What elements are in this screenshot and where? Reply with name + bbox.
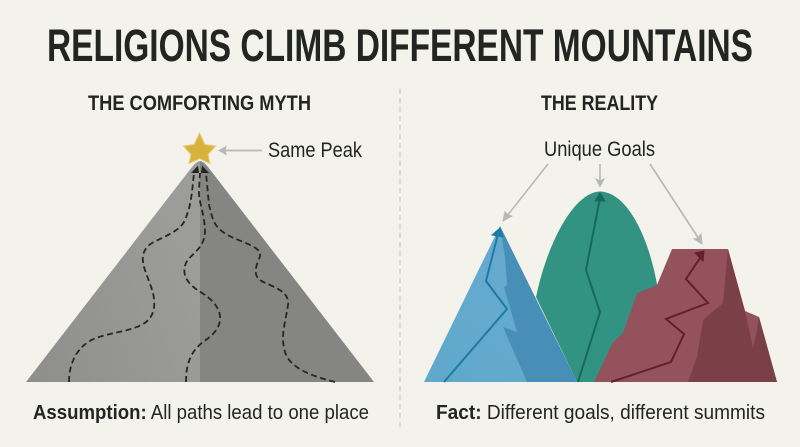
heading: the reality: THE REALITY — [541, 92, 658, 115]
panel: the comforting myth — [26, 92, 374, 424]
dashed paths — [69, 173, 335, 382]
grey mountain — [26, 161, 374, 382]
arrowheads at the peak — [191, 166, 209, 173]
red mountain — [594, 249, 777, 382]
blue route — [444, 228, 507, 382]
panel: the reality — [424, 92, 777, 424]
icon: gold star — [184, 133, 216, 164]
heading: the comforting myth: THE COMFORTING MYTH — [88, 92, 311, 115]
label: unique goals: Unique Goals — [544, 138, 655, 161]
blue mountain — [424, 226, 577, 382]
arrow to star — [219, 146, 262, 154]
arrows to summits — [503, 164, 702, 244]
red route — [611, 251, 708, 382]
green mountain — [536, 192, 658, 382]
green route — [578, 193, 605, 382]
label: same peak: Same Peak — [268, 139, 362, 162]
caption: fact: Fact: Different goals, different summits — [436, 401, 765, 424]
caption: assumption: Assumption: All paths lead to one place — [33, 401, 369, 424]
